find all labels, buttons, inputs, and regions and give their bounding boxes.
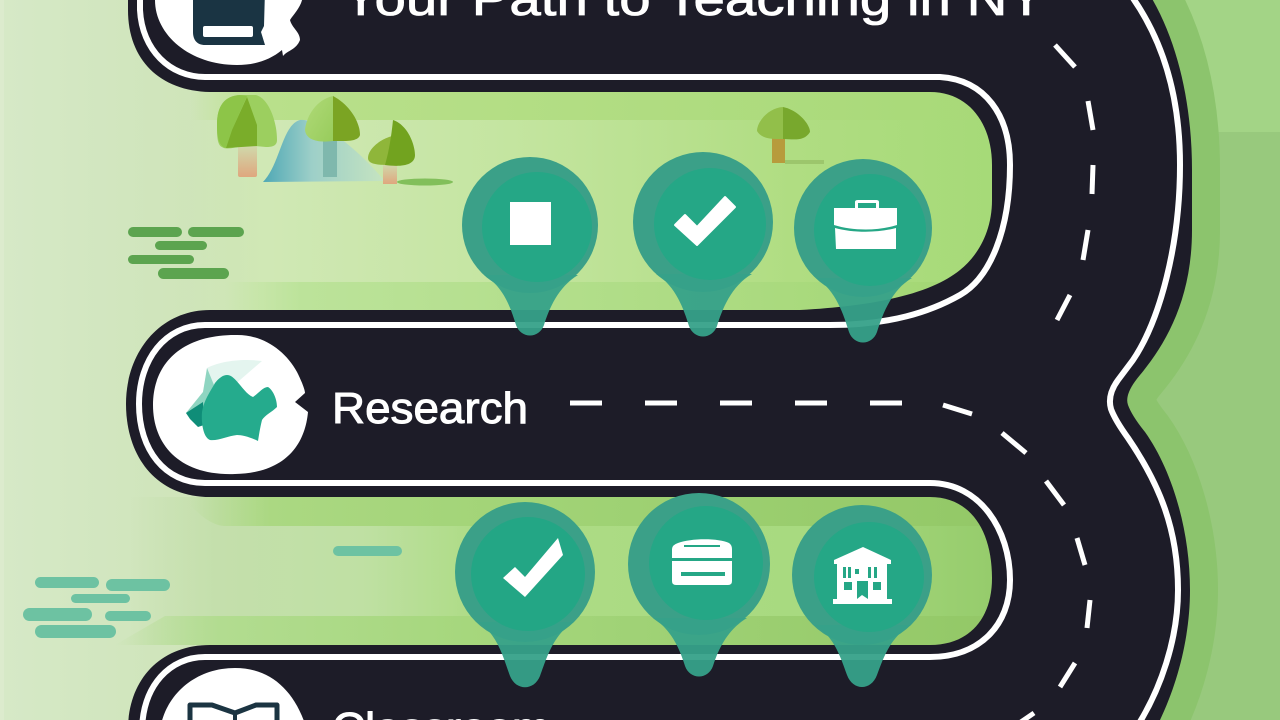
- label: Research: [332, 384, 528, 433]
- tree 1: [217, 95, 277, 177]
- map pin: large check mark: [455, 502, 595, 687]
- map pin: school building: [792, 505, 932, 687]
- grass tufts upper left: [128, 227, 244, 279]
- bay 1 lawn: [203, 92, 992, 310]
- map pin: stacked tray: [628, 493, 770, 676]
- map pin: document: [462, 157, 598, 336]
- tree 2: [305, 96, 360, 177]
- stage 1: title with book icon: [155, 0, 1045, 65]
- map pin: check mark: [633, 152, 773, 336]
- icon badge: research blob: [153, 335, 308, 474]
- icon badge: open book: [160, 668, 307, 720]
- shadow: [785, 160, 824, 164]
- tree 3: [368, 120, 453, 186]
- map pin: briefcase: [794, 159, 932, 342]
- hill: [263, 120, 385, 182]
- grass tufts lower left: [23, 546, 402, 638]
- tree 4: [757, 107, 824, 164]
- stage 2: research: [153, 335, 528, 474]
- icon badge: book: [155, 0, 303, 65]
- stage 3: classroom: [160, 668, 550, 720]
- dashed centre line: [570, 45, 1093, 720]
- white road edge lines: [1110, 0, 1180, 720]
- bay 2 lawn: [100, 497, 1000, 647]
- scenery: trees and hill: [217, 95, 824, 186]
- shadow: [397, 178, 453, 186]
- grass halo right of road: [1127, 0, 1192, 720]
